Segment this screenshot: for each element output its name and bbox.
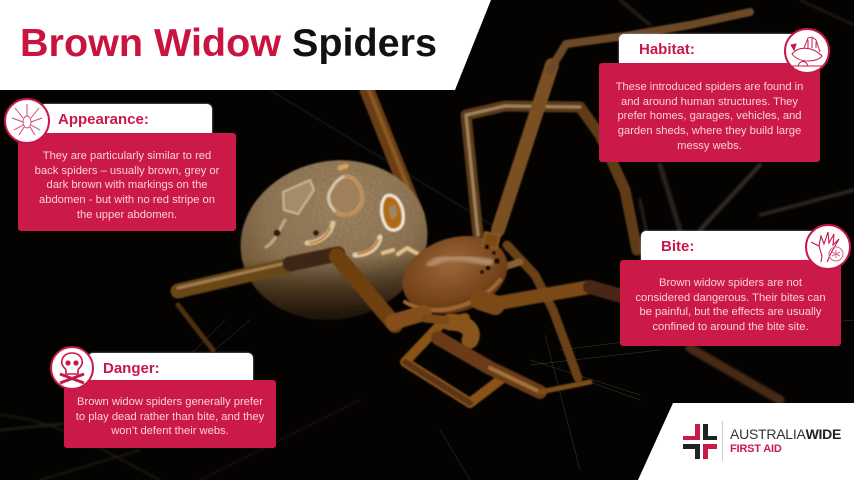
front legs [178, 254, 625, 403]
bite text: considered dangerous. Their bites can [635, 292, 826, 304]
danger text: won’t defent their webs. [111, 425, 229, 437]
abdomen [226, 143, 442, 337]
bite text: confined to around the bite site. [652, 321, 809, 333]
danger text [64, 380, 276, 448]
habitat text: messy webs. [677, 140, 742, 152]
appearance label: Appearance: [58, 111, 149, 128]
danger text: Brown widow spiders generally prefer [77, 396, 263, 408]
bite label: Bite: [661, 238, 694, 255]
icon: spider [4, 98, 50, 144]
habitat label: Habitat: [639, 41, 695, 58]
habitat text: prefer homes, garages, vehicles, and [617, 110, 802, 122]
habitat label [619, 34, 803, 68]
appearance text: the upper abdomen. [77, 209, 177, 221]
cephalothorax [392, 223, 518, 327]
logo mark [683, 424, 717, 459]
logo panel [638, 403, 854, 480]
habitat text: and around human structures. They [621, 96, 798, 108]
danger text: to play dead rather than bite, and they [76, 411, 264, 423]
bite text: Brown widow spiders are not [659, 277, 802, 289]
appearance text: dark brown with markings on the [46, 179, 208, 191]
bite text: be painful, but the effects are usually [639, 306, 822, 318]
habitat text: garden sheds, where they build large [618, 125, 801, 137]
logo divider [722, 421, 723, 461]
panel: danger [50, 346, 276, 448]
logo text: AUSTRALIAWIDE [730, 426, 841, 442]
appearance text: back spiders – usually brown, grey or [35, 165, 219, 177]
panel: appearance [4, 98, 236, 231]
habitat text: These introduced spiders are found in [616, 81, 803, 93]
bite label [641, 231, 821, 264]
logo text: FIRST AID [730, 443, 782, 455]
icon: hand bite [805, 224, 851, 270]
appearance text: They are particularly similar to red [43, 150, 211, 162]
bite text [620, 260, 841, 346]
icon: skull and crossbones [50, 346, 94, 390]
danger label: Danger: [103, 360, 160, 377]
icon: habitat [784, 28, 830, 74]
logo text [730, 430, 841, 452]
appearance label [40, 104, 212, 138]
habitat text [599, 63, 820, 162]
danger label [88, 353, 253, 385]
appearance text: abdomen - but with no red stripe on [39, 194, 215, 206]
back legs [367, 12, 750, 378]
appearance text [18, 133, 236, 231]
title banner: Brown Widow Spiders [20, 22, 437, 65]
panel: bite [620, 224, 851, 346]
panel: habitat [599, 28, 830, 162]
